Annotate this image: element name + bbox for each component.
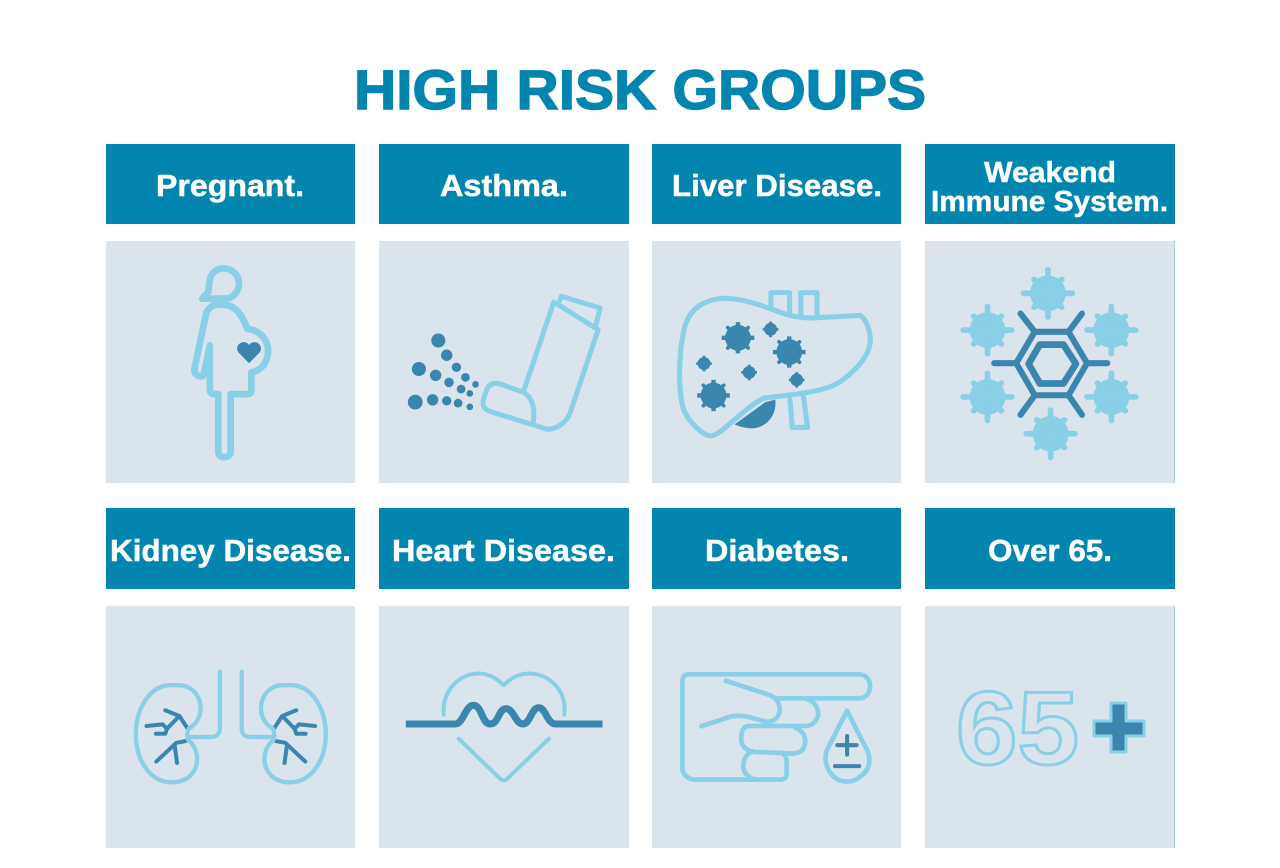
panel: over 65 bbox=[925, 508, 1175, 848]
icon: pregnant woman bbox=[194, 268, 268, 457]
icon: heart with pulse bbox=[406, 673, 602, 780]
heading: weakend immune system bbox=[931, 157, 1168, 218]
heading: heart disease: Heart Disease. bbox=[392, 533, 615, 568]
icon: inhaler bbox=[408, 296, 600, 429]
panel: asthma bbox=[379, 144, 629, 483]
icon: 65 plus: 65 bbox=[956, 671, 1079, 787]
heading: kidney disease: Kidney Disease. bbox=[110, 533, 351, 568]
icon: finger and blood drop bbox=[682, 674, 870, 782]
icon: kidneys bbox=[136, 672, 326, 782]
heading: asthma: Asthma. bbox=[440, 168, 568, 203]
icon: liver bbox=[680, 293, 870, 436]
heading: weakend immune system: Immune System. bbox=[931, 186, 1168, 218]
heading: pregnant: Pregnant. bbox=[156, 168, 304, 203]
panel: pregnant bbox=[106, 144, 355, 483]
heading: over 65: Over 65. bbox=[988, 533, 1112, 568]
icon: 65 plus bbox=[956, 671, 1144, 787]
panel: kidney disease bbox=[106, 508, 355, 848]
title: HIGH RISK GROUPS bbox=[354, 58, 926, 121]
panel: liver disease bbox=[652, 144, 901, 483]
heading: liver disease: Liver Disease. bbox=[672, 168, 882, 203]
panel: diabetes bbox=[652, 508, 901, 848]
panel: heart disease bbox=[379, 508, 629, 848]
heading: weakend immune system: Weakend bbox=[984, 157, 1116, 189]
panel: weakend immune system bbox=[925, 144, 1175, 483]
heading: diabetes: Diabetes. bbox=[705, 533, 849, 568]
icon: viruses around cell bbox=[963, 270, 1136, 457]
